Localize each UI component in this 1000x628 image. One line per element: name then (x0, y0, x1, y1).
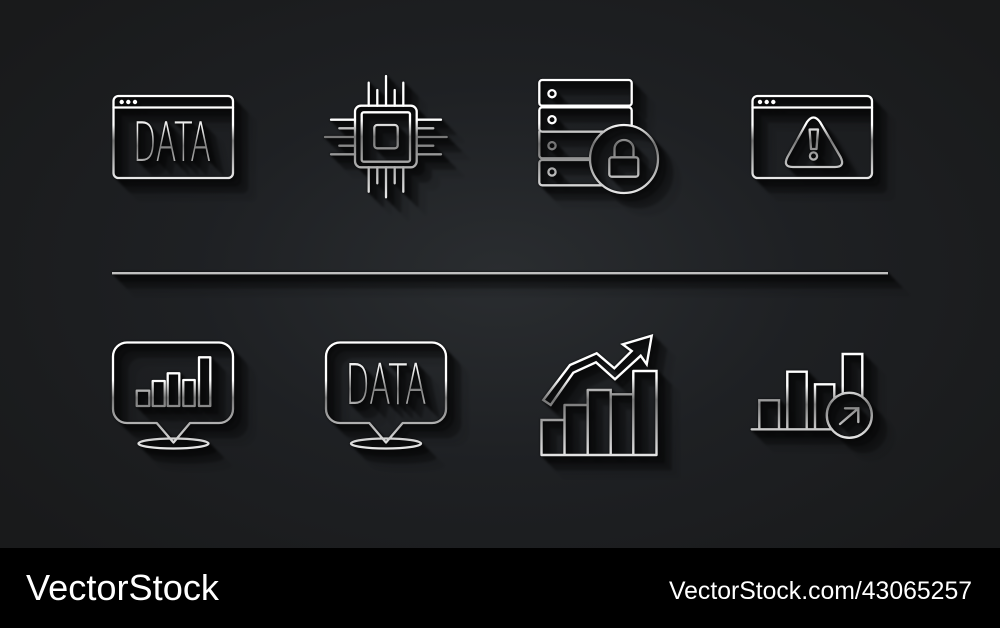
divider (112, 272, 888, 274)
icon: bar chart with arrow badge (752, 354, 872, 438)
label: DATA: DATA (133, 111, 211, 174)
icon: location pin with bar chart (113, 342, 233, 448)
footer bar (0, 548, 1000, 628)
label: DATA: DATA (346, 353, 426, 418)
icon: browser window with DATA (114, 96, 233, 178)
icon: location pin with DATA (326, 342, 446, 448)
image id: VectorStock.com/43065257 (669, 577, 972, 605)
brand wordmark: VectorStock (26, 567, 220, 608)
icon: processor chip (325, 76, 447, 197)
icon: browser window with warning triangle (752, 96, 872, 178)
icon: growth bar chart with rising arrow (542, 336, 656, 455)
icon: server with padlock (539, 80, 658, 193)
